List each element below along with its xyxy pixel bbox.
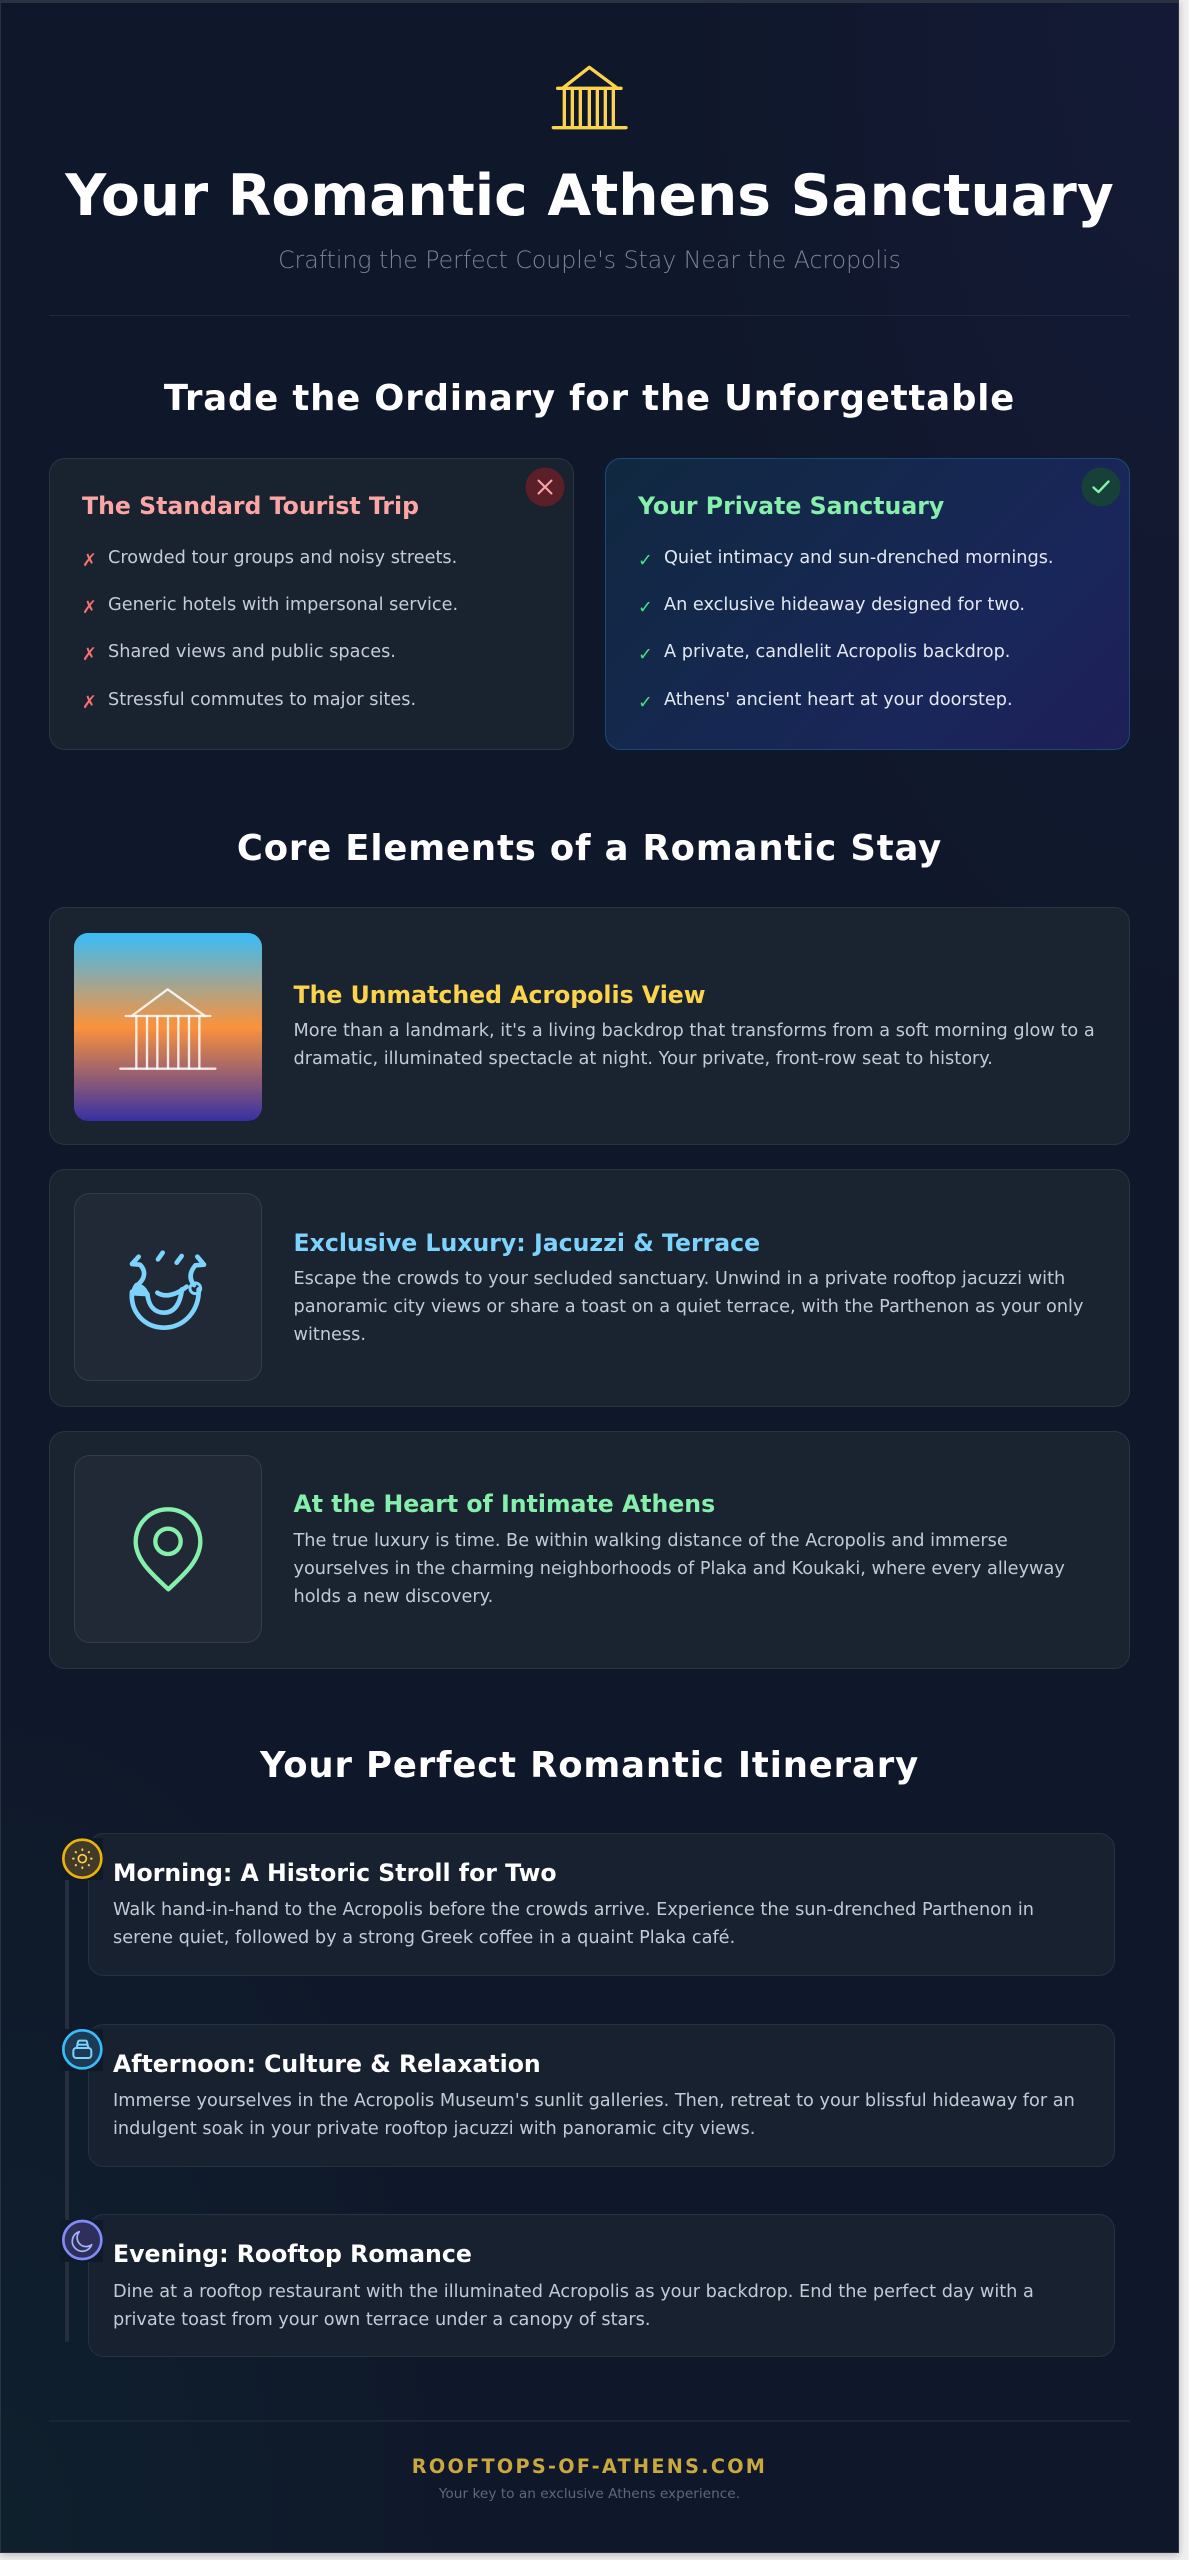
list item 1: Crowded tour groups and noisy streets. (108, 548, 457, 568)
icon box: pin (74, 1455, 262, 1643)
subtitle: Crafting the Perfect Couple's Stay Near the Acropolis (278, 246, 901, 274)
list item 3: ✗ (82, 645, 97, 665)
text: afternoon: Immerse yourselves in the Acropolis Museum's sunlit galleries. Then, retreat to your blissful hideaway for an (113, 2091, 1075, 2111)
text: evening (113, 2282, 1034, 2330)
text: acropolis view (294, 1021, 1095, 1069)
list item 4: Athens' ancient heart at your doorstep. (664, 690, 1013, 710)
heading: exclusive luxury: Exclusive Luxury: Jacuzzi & Terrace (294, 1229, 760, 1257)
heading: evening: Evening: Rooftop Romance (113, 2240, 472, 2268)
title: Your Romantic Athens Sanctuary (65, 163, 1114, 229)
footer: tagline: Your key to an exclusive Athens experience. (439, 2486, 740, 2502)
heading: standard trip: The Standard Tourist Trip (82, 492, 419, 520)
icon: header temple (552, 66, 628, 130)
list item 1: ✓ (638, 551, 653, 571)
icon: jacuzzi (129, 1250, 206, 1330)
heading: core elements: Core Elements of a Romantic Stay (237, 828, 942, 869)
icon: white temple (119, 988, 217, 1070)
panel: afternoon (88, 2024, 1115, 2167)
icon box: jacuzzi (74, 1193, 262, 1381)
footer: site name: ROOFTOPS-OF-ATHENS.COM (412, 2455, 767, 2478)
icon: sun (62, 1838, 103, 1879)
text: morning: serene quiet, followed by a strong Greek coffee in a quaint Plaka café. (113, 1928, 735, 1948)
icon: cross badge (526, 468, 564, 506)
icon: map pin (134, 1507, 202, 1592)
heading: acropolis view: The Unmatched Acropolis View (294, 981, 706, 1009)
heading: heart of athens: At the Heart of Intimate Athens (294, 1490, 715, 1518)
heading: private sanctuary: Your Private Sanctuary (638, 492, 944, 520)
text: evening: Dine at a rooftop restaurant with the illuminated Acropolis as your backdrop. End the perfect day with a (113, 2282, 1034, 2302)
heading: afternoon: Afternoon: Culture & Relaxation (113, 2050, 541, 2078)
text: heart of athens: holds a new discovery. (294, 1587, 493, 1607)
text: morning: Walk hand-in-hand to the Acropolis before the crowds arrive. Experience the sun-drenched Parthenon in (113, 1900, 1034, 1920)
text: acropolis view: More than a landmark, it's a living backdrop that transforms from a soft morning glow to a (294, 1021, 1095, 1041)
panel: heart of athens (49, 1431, 1130, 1669)
panel: private sanctuary (605, 458, 1130, 750)
list item 4: Stressful commutes to major sites. (108, 690, 416, 710)
list item 3: ✓ (638, 645, 653, 665)
text: heart of athens (293, 1531, 1065, 1607)
list item 3: Shared views and public spaces. (108, 642, 396, 662)
text: afternoon (113, 2091, 1075, 2139)
text: exclusive luxury (294, 1269, 1083, 1345)
text: heart of athens: yourselves in the charming neighborhoods of Plaka and Koukaki, where every alleyway (294, 1559, 1065, 1579)
text: exclusive luxury: Escape the crowds to your secluded sanctuary. Unwind in a private rooftop jacuzzi with (294, 1269, 1065, 1289)
icon: check badge (1082, 468, 1120, 506)
list item 2: Generic hotels with impersonal service. (108, 595, 458, 615)
panel: exclusive luxury (49, 1169, 1130, 1407)
list item 4: ✓ (638, 693, 653, 713)
icon: moon (62, 2220, 103, 2260)
text: morning (113, 1900, 1034, 1948)
panel: standard tourist trip (49, 458, 574, 750)
text: exclusive luxury: panoramic city views or share a toast on a quiet terrace, with the Parthenon as your only (294, 1297, 1083, 1317)
icon: soak tub (62, 2029, 103, 2070)
image: sunset gradient with temple (74, 933, 262, 1121)
panel: acropolis view (49, 907, 1130, 1145)
panel: evening (88, 2214, 1115, 2357)
heading: trade the ordinary: Trade the Ordinary for the Unforgettable (164, 378, 1015, 419)
timeline line (65, 1878, 69, 2342)
list item 3: A private, candlelit Acropolis backdrop. (664, 642, 1010, 662)
text: exclusive luxury: witness. (294, 1325, 366, 1345)
panel: morning (88, 1833, 1115, 1976)
list item 2: ✗ (82, 598, 97, 618)
text: acropolis view: dramatic, illuminated spectacle at night. Your private, front-row seat to history. (294, 1049, 993, 1069)
text: afternoon: indulgent soak in your private rooftop jacuzzi with panoramic city views. (113, 2119, 755, 2139)
list item 2: ✓ (638, 598, 653, 618)
text: evening: private toast from your own terrace under a canopy of stars. (113, 2310, 651, 2330)
list item 1: Quiet intimacy and sun-drenched mornings. (664, 548, 1054, 568)
list item 2: An exclusive hideaway designed for two. (664, 595, 1025, 615)
list item 4: ✗ (82, 693, 97, 713)
heading: itinerary: Your Perfect Romantic Itinerary (260, 1745, 919, 1786)
list item 1: ✗ (82, 551, 97, 571)
heading: morning: Morning: A Historic Stroll for Two (113, 1859, 557, 1887)
text: heart of athens: The true luxury is time. Be within walking distance of the Acropolis and immerse (294, 1531, 1008, 1551)
